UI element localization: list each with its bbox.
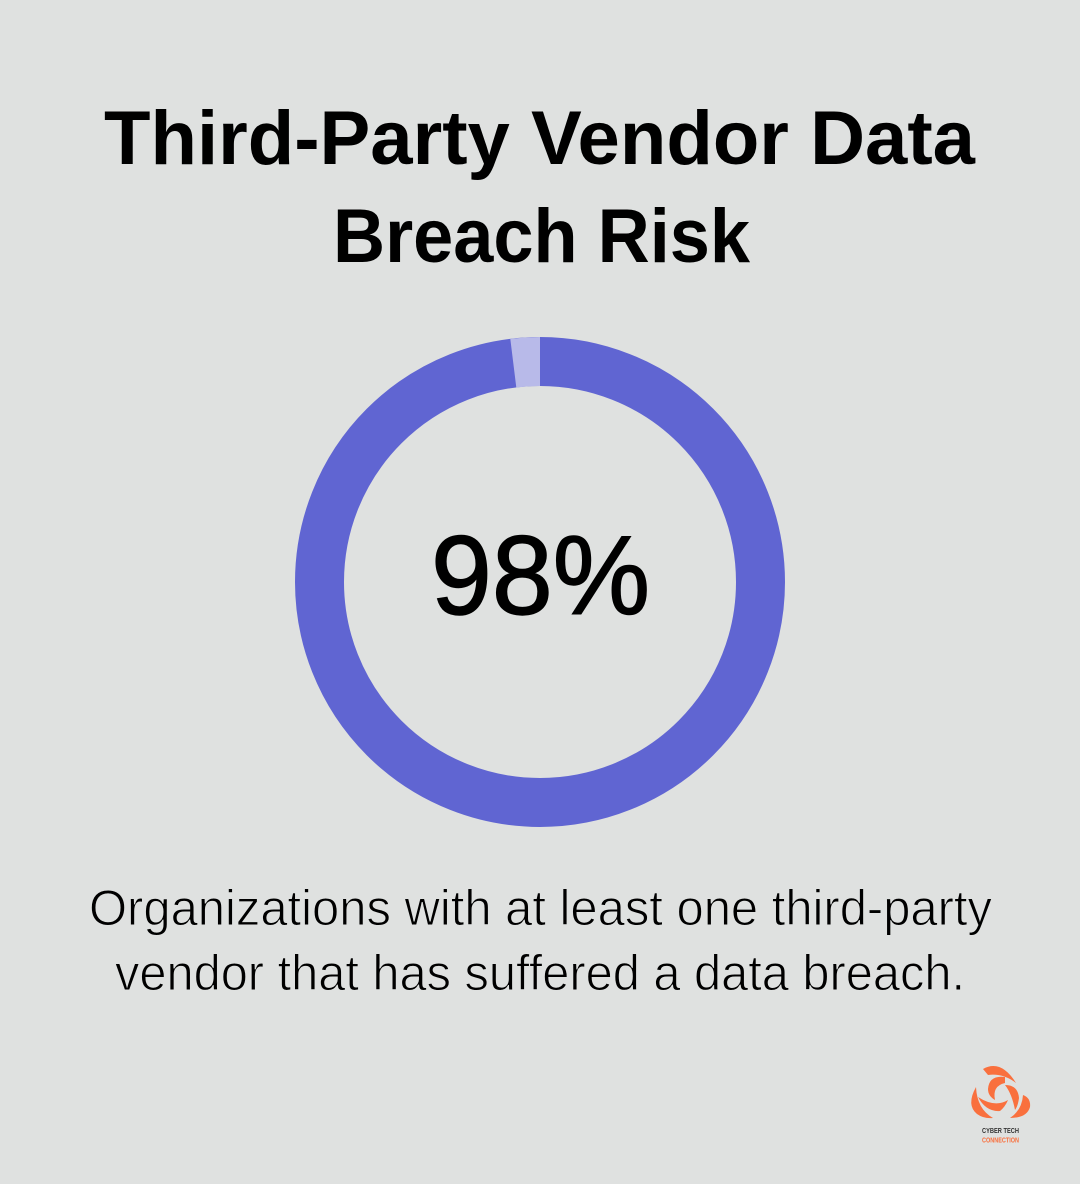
title: Breach Risk [333, 194, 751, 279]
logo: Cyber Tech Connection [971, 1066, 1030, 1144]
remaining 2% segment [510, 337, 540, 388]
center value: 98% [431, 513, 650, 638]
title [104, 96, 976, 279]
icon: three swooshes [971, 1066, 1030, 1118]
logo wordmark: CYBER TECH [982, 1128, 1019, 1135]
logo wordmark [982, 1128, 1019, 1144]
description text [89, 880, 992, 1001]
donut chart: 98% [320, 337, 760, 802]
description text: Organizations with at least one third-party [89, 880, 992, 936]
title: Third-Party Vendor Data [104, 96, 976, 181]
description text: vendor that has suffered a data breach. [115, 945, 965, 1001]
logo wordmark: CONNECTION [982, 1138, 1019, 1144]
